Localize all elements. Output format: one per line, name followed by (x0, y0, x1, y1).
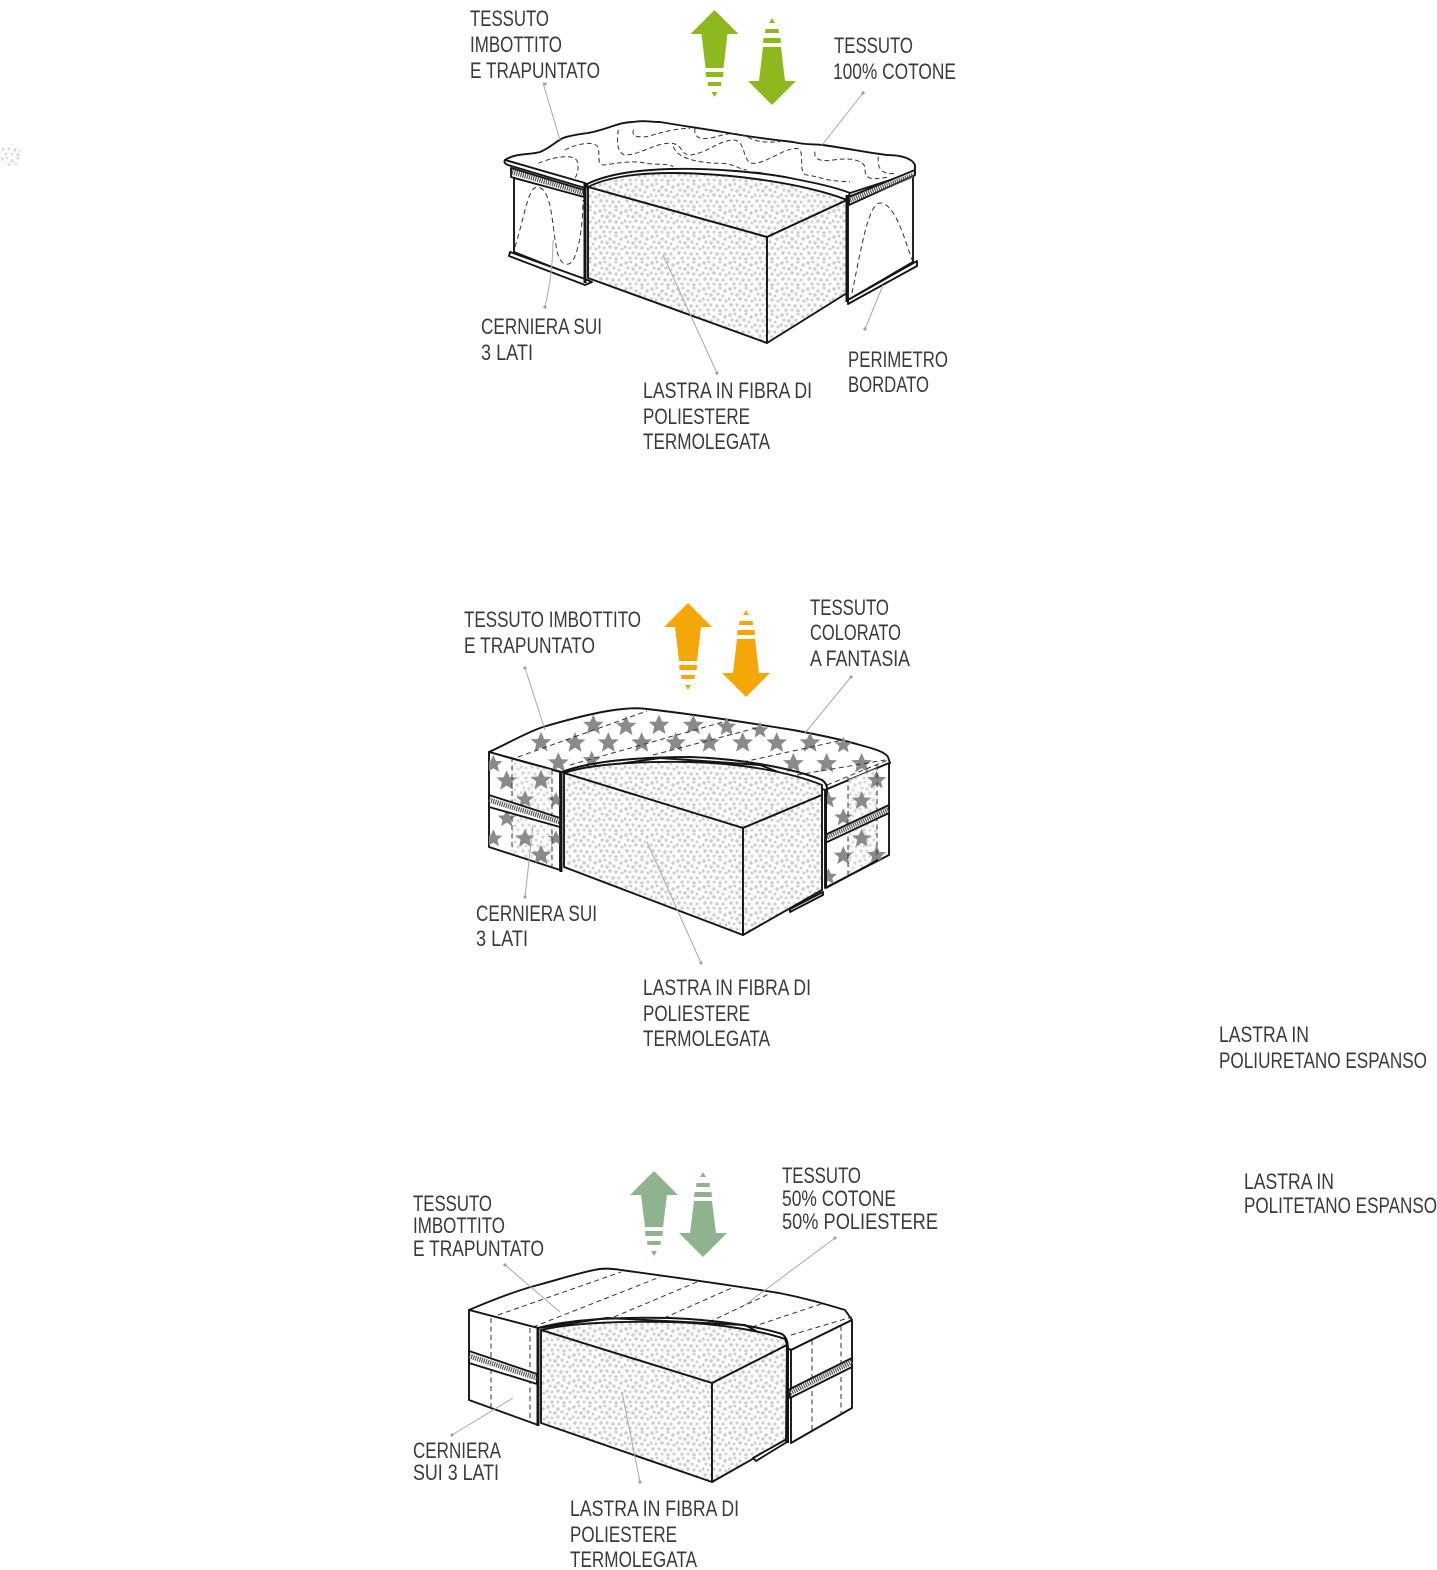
panel: mattress 50% cotton 50% polyester (413, 1163, 938, 1570)
label: tessuto colorato a fantasia (810, 595, 910, 671)
leader lines (450, 1236, 837, 1484)
label: cerniera sui 3 lati: CERNIERA SUI (476, 901, 597, 926)
label: cerniera sui 3 lati: SUI 3 LATI (413, 1460, 499, 1485)
label: cerniera sui 3 lati (481, 314, 602, 365)
label: lastra in fibra di poliestere: POLIESTERE (643, 404, 750, 429)
illustration: plain zipped mattress (469, 1269, 852, 1482)
label: tessuto 50% cotone 50% poliestere: TESSUTO (782, 1163, 861, 1188)
label: tessuto imbottito e trapuntato: TESSUTO (413, 1191, 492, 1216)
label: lastra in politetano espanso (1244, 1169, 1437, 1218)
label: cerniera sui 3 lati: 3 LATI (476, 926, 528, 951)
label: lastra in fibra di poliestere: TERMOLEGATA (643, 1026, 770, 1051)
label: lastra in fibra di poliestere: LASTRA IN FIBRA DI (643, 975, 811, 1000)
label: lastra in fibra di poliestere: POLIESTERE (643, 1001, 750, 1026)
label: perimetro bordato: BORDATO (848, 372, 929, 397)
leader lines (523, 666, 853, 965)
label: tessuto 100% cotone: TESSUTO (834, 33, 913, 58)
panel: mattress 100% cotton (470, 6, 956, 454)
label: lastra in fibra di poliestere: POLIESTERE (570, 1522, 677, 1547)
label: tessuto imbottito e trapuntato: IMBOTTITO (470, 32, 562, 57)
panel: mattress coloured fantasy (464, 595, 910, 1051)
decorative speckle blob (0, 144, 22, 166)
label: perimetro bordato: PERIMETRO (848, 347, 948, 372)
label: tessuto imbottito e trapuntato: E TRAPUNTATO (413, 1236, 544, 1261)
label: tessuto imbottito e trapuntato (464, 607, 641, 658)
label: tessuto 50% cotone 50% poliestere: 50% COTONE (782, 1186, 896, 1211)
label: tessuto colorato a fantasia: COLORATO (810, 620, 901, 645)
label: lastra in fibra di poliestere: LASTRA IN FIBRA DI (570, 1496, 739, 1521)
label: lastra in fibra di poliestere (570, 1496, 739, 1570)
label: tessuto imbottito e trapuntato: TESSUTO (470, 6, 549, 31)
label: tessuto imbottito e trapuntato: IMBOTTITO (413, 1213, 505, 1238)
label: cerniera sui 3 lati (476, 901, 597, 951)
illustration: quilted mattress with bordered perimeter (504, 121, 917, 343)
label: lastra in fibra di poliestere (643, 975, 811, 1051)
label: tessuto imbottito e trapuntato: TESSUTO IMBOTTITO (464, 607, 641, 632)
label: lastra in fibra di poliestere (643, 378, 812, 454)
label: tessuto colorato a fantasia: A FANTASIA (810, 646, 910, 671)
label: tessuto 50% cotone 50% poliestere: 50% POLIESTERE (782, 1209, 938, 1234)
label: tessuto 50% cotone 50% poliestere (782, 1163, 938, 1234)
label: tessuto imbottito e trapuntato (470, 6, 600, 83)
icon: orange breathability arrows (664, 603, 770, 697)
label: lastra in poliuretano espanso: LASTRA IN (1219, 1022, 1309, 1047)
label: lastra in fibra di poliestere: LASTRA IN FIBRA DI (643, 378, 812, 403)
icon: sage breathability arrows (630, 1171, 727, 1257)
label: tessuto imbottito e trapuntato: E TRAPUNTATO (470, 58, 600, 83)
label: tessuto 100% cotone: 100% COTONE (833, 59, 956, 84)
label: cerniera sui 3 lati: CERNIERA (413, 1438, 501, 1463)
illustration: star patterned mattress (484, 708, 890, 935)
label: perimetro bordato (848, 347, 948, 397)
label: lastra in fibra di poliestere: TERMOLEGATA (643, 429, 770, 454)
label: tessuto colorato a fantasia: TESSUTO (810, 595, 889, 620)
leader lines (543, 82, 883, 375)
label: tessuto imbottito e trapuntato: E TRAPUNTATO (464, 633, 595, 658)
label: cerniera sui 3 lati (413, 1438, 501, 1485)
label: cerniera sui 3 lati: 3 LATI (481, 340, 533, 365)
label: lastra in poliuretano espanso (1219, 1022, 1427, 1073)
icon: green breathability arrows (690, 10, 796, 105)
label: tessuto imbottito e trapuntato (413, 1191, 544, 1261)
label: cerniera sui 3 lati: CERNIERA SUI (481, 314, 602, 339)
label: tessuto 100% cotone (833, 33, 956, 84)
label: lastra in politetano espanso: LASTRA IN (1244, 1169, 1334, 1194)
